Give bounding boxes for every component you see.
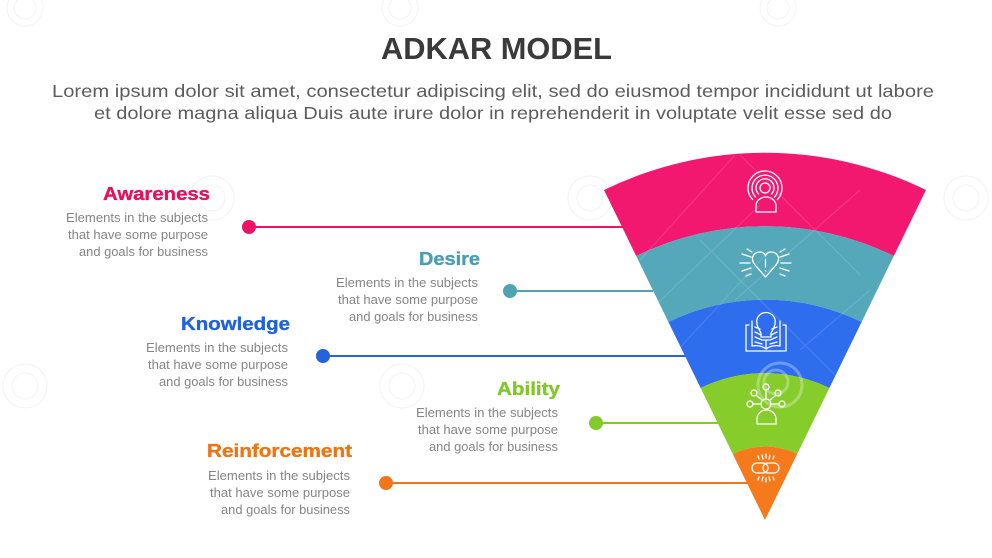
icon: chain link bbox=[752, 454, 779, 482]
label: ability: Elements in the subjects bbox=[416, 405, 559, 420]
label: desire: and goals for business bbox=[349, 309, 478, 324]
label: desire bbox=[336, 249, 480, 324]
label: reinforcement: that have some purpose bbox=[210, 485, 350, 500]
icon: heart alert bbox=[740, 249, 791, 277]
intro text: et dolore magna aliqua Duis aute irure dolor in reprehenderit in voluptate velit esse sed do bbox=[94, 103, 892, 123]
icon: book with bulb bbox=[746, 312, 786, 351]
label: knowledge: that have some purpose bbox=[148, 357, 288, 372]
connector: knowledge bbox=[316, 349, 686, 363]
intro text: Lorem ipsum dolor sit amet, consectetur adipiscing elit, sed do eiusmod tempor incididunt ut labore bbox=[52, 81, 934, 101]
label: ability: Ability bbox=[497, 379, 560, 399]
label: awareness: Awareness bbox=[103, 184, 210, 204]
connector: reinforcement bbox=[379, 476, 748, 490]
band: reinforcement bbox=[733, 447, 797, 520]
connector: ability bbox=[589, 416, 718, 430]
label: awareness: and goals for business bbox=[79, 244, 208, 259]
label: reinforcement bbox=[207, 441, 352, 517]
connector: awareness bbox=[242, 220, 623, 234]
label: awareness: Elements in the subjects bbox=[66, 210, 209, 225]
label: knowledge bbox=[146, 314, 290, 389]
icon: network person bbox=[747, 384, 785, 424]
intro text bbox=[52, 81, 934, 123]
funnel chart bbox=[604, 153, 926, 520]
label: awareness: that have some purpose bbox=[68, 227, 208, 242]
icon: signal person bbox=[748, 171, 782, 212]
label: ability: that have some purpose bbox=[418, 422, 558, 437]
label: knowledge: Elements in the subjects bbox=[146, 340, 289, 355]
band: ability bbox=[701, 373, 829, 454]
label: reinforcement: Reinforcement bbox=[207, 441, 352, 461]
band: awareness bbox=[604, 153, 926, 256]
band: knowledge bbox=[668, 300, 862, 388]
label: ability bbox=[416, 379, 560, 454]
label: knowledge: and goals for business bbox=[159, 374, 288, 389]
title: ADKAR MODEL bbox=[381, 31, 612, 66]
band: desire bbox=[636, 226, 894, 322]
label: reinforcement: Elements in the subjects bbox=[208, 468, 351, 483]
label: reinforcement: and goals for business bbox=[221, 502, 350, 517]
label: desire: that have some purpose bbox=[338, 292, 478, 307]
label: ability: and goals for business bbox=[429, 439, 558, 454]
label: desire: Elements in the subjects bbox=[336, 275, 479, 290]
label: awareness bbox=[66, 184, 210, 259]
label: desire: Desire bbox=[419, 249, 480, 269]
connector: desire bbox=[503, 284, 653, 298]
label: knowledge: Knowledge bbox=[181, 314, 290, 334]
